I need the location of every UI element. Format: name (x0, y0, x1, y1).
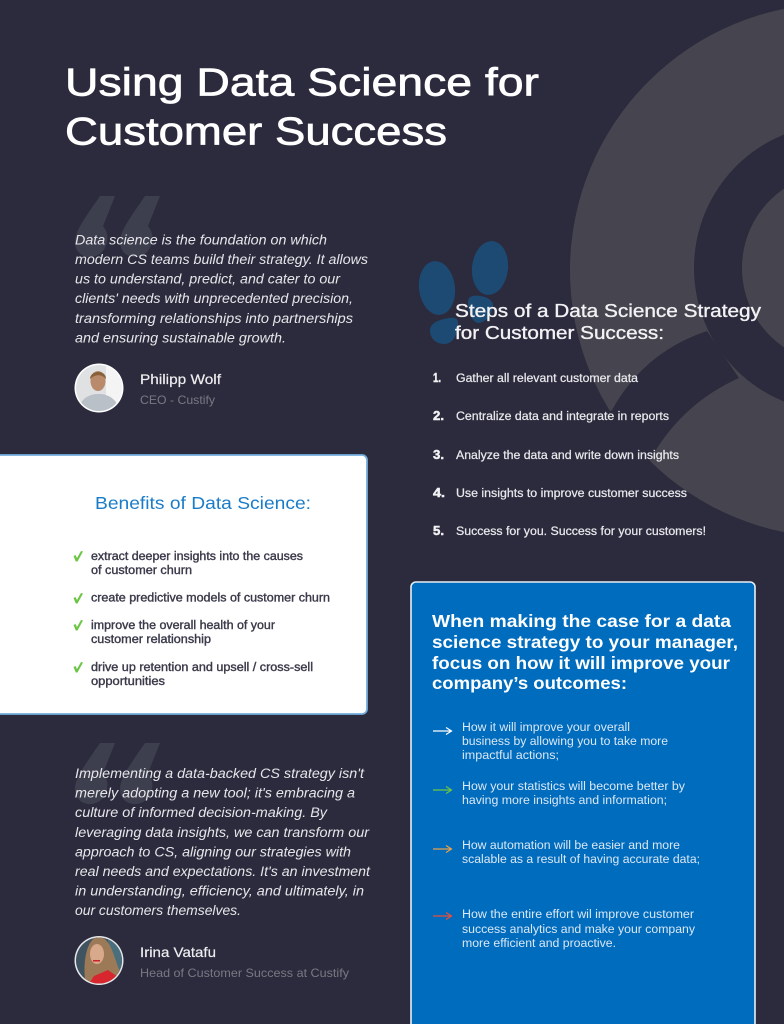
benefits list: extract deeper insights into the causes (91, 549, 303, 563)
attribution: Philipp Wolf (140, 372, 221, 407)
benefits list: of customer churn (91, 563, 192, 577)
heading: steps (455, 301, 761, 343)
benefits list: improve the overall health of your (91, 618, 275, 632)
quote mark: first testimonial (75, 196, 160, 257)
steps list: 5. (433, 523, 444, 538)
attribution: Irina Vatafu: Irina Vatafu (140, 945, 216, 960)
testimonial text: Irina Vatafu: leveraging data insights, we can transform our (75, 825, 370, 840)
benefits list (91, 549, 330, 688)
testimonial text: Philipp Wolf: modern CS teams build their strategy. It allows (75, 252, 368, 267)
point 4: more efficient and proactive. (462, 936, 616, 950)
testimonial text: Irina Vatafu: Implementing a data-backed CS strategy isn't (75, 766, 365, 781)
point 4: How the entire effort wil improve customer (462, 907, 694, 921)
arrow: green (433, 786, 452, 794)
testimonial text: Philipp Wolf: Data science is the foundation on which (75, 232, 327, 248)
steps list: Analyze the data and write down insights (456, 448, 679, 462)
panel heading: science strategy to your manager, (432, 632, 738, 652)
benefits list: create predictive models of customer churn (91, 590, 330, 604)
point 3: How automation will be easier and more (462, 838, 680, 852)
point 1 (462, 720, 668, 762)
quote mark: second testimonial (75, 743, 160, 804)
avatar: Irina Vatafu (74, 936, 124, 985)
panel heading: When making the case for a data (432, 611, 731, 631)
title: Using Data Science for (65, 62, 539, 104)
arrow: white (433, 728, 452, 734)
point 3 (462, 838, 700, 866)
steps list: Centralize data and integrate in reports (456, 409, 669, 423)
steps list (433, 370, 706, 538)
heading: steps: for Customer Success: (455, 323, 664, 343)
steps list: 2. (433, 408, 444, 423)
panel: benefits of data science (0, 455, 367, 714)
steps list: 4. (433, 485, 445, 500)
point 3: scalable as a result of having accurate data; (462, 852, 700, 866)
testimonial text: Philipp Wolf: and ensuring sustainable growth. (75, 330, 286, 345)
panel: making the case to your manager (411, 582, 755, 1024)
attribution: Irina Vatafu (140, 945, 349, 980)
point 4: success analytics and make your company (462, 922, 696, 936)
panel heading (432, 611, 738, 693)
attribution: Philipp Wolf: CEO - Custify (140, 394, 215, 407)
point 1: business by allowing you to take more (462, 734, 668, 748)
icon: footprints (416, 239, 511, 344)
testimonial text: Philipp Wolf: transforming relationships into partnerships (75, 311, 353, 326)
benefits list: drive up retention and upsell / cross-sell (91, 660, 313, 674)
arrow: orange (433, 846, 452, 852)
testimonial text: Irina Vatafu (75, 766, 371, 918)
panel heading: focus on how it will improve your (432, 653, 730, 673)
arrow: red (433, 912, 452, 920)
steps list: Gather all relevant customer data (456, 371, 638, 385)
checkmarks (74, 551, 83, 672)
point 2: How your statistics will become better by (462, 779, 686, 793)
point 1: How it will improve your overall (462, 720, 630, 734)
point 4 (462, 907, 696, 950)
panel heading: company’s outcomes: (432, 673, 627, 693)
testimonial text: Irina Vatafu: real needs and expectations. It's an investment (75, 864, 371, 879)
steps list: 3. (433, 447, 444, 462)
steps list: Use insights to improve customer success (456, 486, 687, 500)
heading: steps: Steps of a Data Science Strategy (455, 301, 761, 321)
testimonial text: Irina Vatafu: merely adopting a new tool; it's embracing a (75, 786, 355, 801)
testimonial text: Philipp Wolf: us to understand, predict, and cater to our (75, 272, 341, 287)
background logo mark (570, 3, 784, 538)
attribution: Philipp Wolf: Philipp Wolf (140, 372, 221, 387)
attribution: Irina Vatafu: Head of Customer Success at Custify (140, 967, 349, 980)
testimonial text: Irina Vatafu: in understanding, efficiency, and ultimately, in (75, 884, 364, 899)
avatar: Philipp Wolf (74, 364, 124, 414)
steps list: 1. (433, 370, 441, 385)
testimonial text: Irina Vatafu: culture of informed decision-making. By (75, 805, 328, 820)
point 2 (462, 779, 686, 807)
benefits list: customer relationship (91, 632, 211, 646)
steps list: Success for you. Success for your customers! (456, 524, 706, 538)
heading: benefits: Benefits of Data Science: (95, 493, 311, 513)
testimonial text: Irina Vatafu: our customers themselves. (75, 903, 241, 918)
testimonial text: Philipp Wolf: clients' needs with unprecedented precision, (75, 291, 353, 306)
title: Customer Success (65, 110, 447, 154)
point 1: impactful actions; (462, 748, 559, 762)
testimonial text: Irina Vatafu: approach to CS, aligning our strategies with (75, 844, 351, 859)
title (65, 62, 539, 154)
point 2: having more insights and information; (462, 793, 667, 807)
testimonial text: Philipp Wolf (75, 232, 368, 345)
benefits list: opportunities (91, 674, 165, 688)
